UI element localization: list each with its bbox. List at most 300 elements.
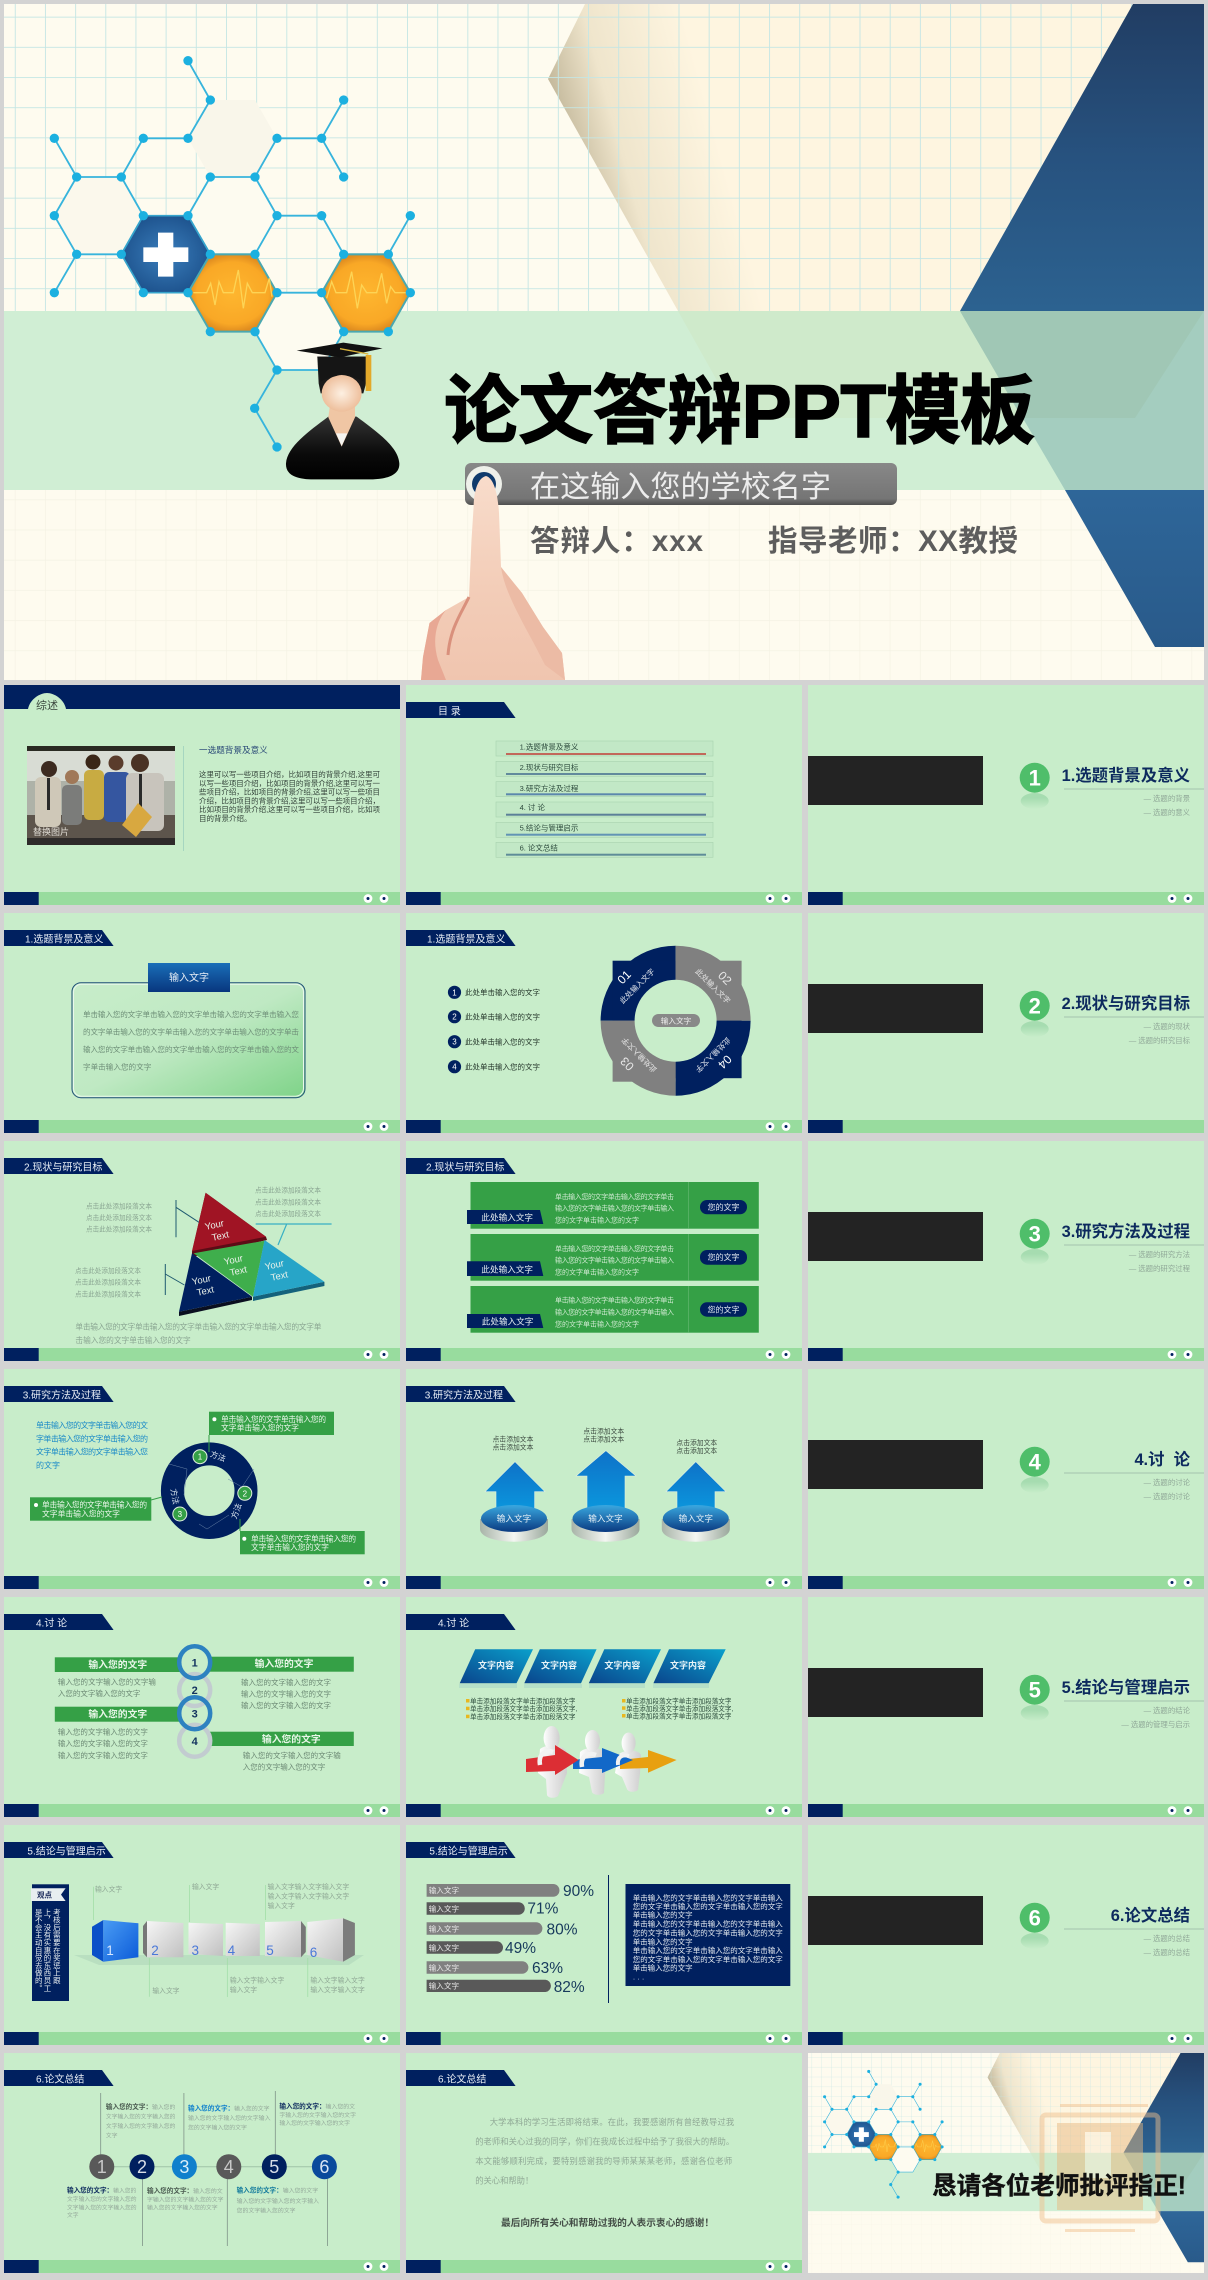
content card (72, 983, 305, 1098)
contents list: 2.现状与研究目标 (520, 762, 579, 772)
footer bar (808, 1804, 1204, 1817)
contents list: 6. 论文总结 (520, 842, 558, 852)
blue intro text (36, 1420, 148, 1470)
panel: section 1 divider (808, 685, 1204, 905)
annotations above blocks: 输入文字输入文字输入文字 (268, 1892, 349, 1900)
ring chart (601, 946, 751, 1096)
callout: top (209, 1412, 334, 1452)
section subtopics: — 选题的讨论 (1144, 1478, 1191, 1487)
text block: upper left (58, 1676, 156, 1698)
ring diagram: 方法 (169, 1488, 181, 1505)
footer bar (808, 2032, 1204, 2045)
header tab: 4.讨 论 (36, 1616, 67, 1630)
3D triangle chart: Text (196, 1284, 215, 1299)
cover background with grid and blue facets (4, 4, 1204, 680)
contents list: 4. 讨 论 (520, 802, 546, 812)
number badge (1020, 1675, 1050, 1721)
row 3 (467, 1286, 759, 1333)
timeline with numbered nodes (89, 2091, 337, 2246)
bar chart: 63% (532, 1960, 563, 1977)
ring diagram: 2 (243, 1489, 248, 1498)
chain of rings (179, 1646, 210, 1757)
section subtopics (1129, 1250, 1191, 1273)
row 1: 此处输入文字 (481, 1212, 533, 1223)
dark image placeholder (808, 1896, 983, 1945)
bar chart: 输入文字 (429, 1885, 459, 1895)
divider (608, 1875, 609, 2003)
number badge: 4 (1029, 1450, 1042, 1474)
ring chart: 此处输入文字 (617, 966, 657, 1006)
photo: team meeting: 替换图片 (33, 826, 69, 837)
text block: lower left: 输入您的文字输入您的文字 (58, 1750, 148, 1760)
annotations above blocks (94, 1882, 349, 1922)
footer bar (406, 2032, 802, 2045)
3D triangle chart: Text (229, 1264, 248, 1279)
text block: lower left (58, 1726, 148, 1760)
blue intro text: 的文字 (36, 1460, 60, 1470)
body text: 些项目介绍，比如项目的背景介绍,这里可以写一些项目 (199, 787, 380, 797)
panel: timeline slide (4, 2053, 400, 2273)
section subtopics: — 选题的研究过程 (1129, 1264, 1191, 1273)
advisor name: 指导老师：XX教授 (768, 525, 1018, 558)
text block 3: 输入您的文字：输入您的文 (279, 2102, 355, 2110)
header tab: 1.选题背景及意义 (427, 932, 505, 946)
number badge (1020, 991, 1050, 1037)
bar chart: 90% (563, 1883, 594, 1900)
text block 1: 输入您的文字：输入您的 (106, 2102, 175, 2111)
body text: 以写一些项目介绍，比如项目的背景介绍,这里可以写一 (199, 778, 380, 788)
content card: 单击输入您的文字单击输入您的文字单击输入您的文字单击输入您 (83, 1009, 299, 1019)
text block 4 (67, 2186, 137, 2219)
thanks paragraph: 的老师和关心过我的同学，你们在我成长过程中给予了我很大的帮助。 (475, 2136, 734, 2146)
text block 2: 输入您的文字输入您的文字输入 (188, 2114, 271, 2122)
section title: 5.结论与管理启示 (1062, 1678, 1190, 1697)
text block 6 (237, 2186, 319, 2214)
green heading bars: 输入您的文字 (88, 1708, 147, 1720)
text block 2: 输入您的文字：输入您的文字 (188, 2104, 270, 2112)
number badge (1020, 1447, 1050, 1493)
footer bar (406, 1120, 802, 1133)
bar chart: 49% (505, 1940, 536, 1957)
block row chart: 1 (106, 1943, 114, 1958)
callout: lower left: 点击此处添加段落文本 (75, 1278, 141, 1287)
four parallelogram labels: 文字内容 (478, 1660, 514, 1670)
arrow button 1 (480, 1462, 548, 1542)
panel: method cycle slide (4, 1369, 400, 1589)
panel: teamwork arrows slide (406, 1597, 802, 1817)
section subtopics: — 选题的意义 (1144, 808, 1191, 817)
callout: upper left: 点击此处添加段落文本 (86, 1202, 152, 1210)
block row chart: 3 (191, 1943, 199, 1958)
numbered list: 4 (452, 1063, 457, 1072)
annotations below blocks: 输入文字 (152, 1986, 180, 1995)
timeline with numbered nodes: 3 (179, 2157, 189, 2177)
thanks paragraph: 的关心和帮助！ (475, 2175, 533, 2185)
footer bar (808, 1348, 1204, 1361)
panel: linked rings slide (4, 1597, 400, 1817)
annotations above blocks: 输入文字 (95, 1884, 122, 1894)
block row chart: 2 (151, 1943, 159, 1958)
footer bar (808, 1576, 1204, 1589)
contents list: 3.研究方法及过程 (520, 783, 579, 793)
text block 6: 输入您的文字：输入您的文字 (237, 2186, 318, 2194)
section title: 2.现状与研究目标 (1062, 994, 1190, 1013)
divider (183, 746, 184, 851)
ring diagram: 方法 (229, 1502, 244, 1520)
numbered list: 1 (452, 988, 457, 997)
navy text panel: 单击输入您的文字单击输入您的文字单击输入 (633, 1892, 783, 1902)
footer bar (406, 892, 802, 905)
dark image placeholder (808, 756, 983, 805)
icon: hexagon network (823, 2070, 944, 2199)
section subtopics: — 选题的现状 (1144, 1022, 1191, 1031)
header tab: 2.现状与研究目标 (24, 1160, 102, 1174)
caption text: 击输入您的文字单击输入您的文字 (75, 1335, 191, 1345)
ring diagram (169, 1449, 254, 1529)
text block: lower right (243, 1750, 341, 1772)
text block: upper right: 输入您的文字输入您的文字 (241, 1688, 331, 1698)
callout: left (30, 1497, 162, 1521)
content card: 字单击输入您的文字 (83, 1062, 152, 1072)
text block 5: 输入您的文字：输入您的文 (147, 2186, 223, 2195)
title: 论文答辩PPT模板 (444, 369, 1035, 453)
annotations below blocks: 输入文字输入文字 (310, 1976, 365, 1984)
callout: upper left: 点击此处添加段落文本 (86, 1213, 152, 1222)
panel: ring diagram slide (406, 913, 802, 1133)
green heading bars: 输入您的文字 (255, 1657, 314, 1670)
panel: section 5 divider (808, 1597, 1204, 1817)
header tab (4, 2070, 114, 2086)
caption text (75, 1322, 322, 1345)
number badge: 3 (1029, 1222, 1041, 1246)
section subtopics: — 选题的总结 (1144, 1934, 1190, 1943)
navy text panel: 您的文字单击输入您的文字单击输入您的文字 (633, 1927, 783, 1937)
text block 1: 文字输入您的文字输入您的 (106, 2122, 176, 2130)
text block: lower right: 输入您的文字输入您的文字输 (243, 1750, 341, 1760)
numbered list: 2 (452, 1013, 457, 1022)
block row chart: 6 (310, 1945, 317, 1960)
annotations below blocks: 输入文字 (230, 1985, 257, 1994)
navy text panel: 单击输入您的文字 (633, 1910, 693, 1920)
navy text panel: 单击输入您的文字 (633, 1936, 693, 1946)
timeline with numbered nodes: 5 (269, 2157, 279, 2177)
footer bar (808, 1120, 1204, 1133)
panel: three row list slide (406, 1141, 802, 1361)
3D triangle chart: Your (204, 1218, 225, 1233)
caption group: 点击添加文本 (583, 1434, 624, 1444)
body text: 介绍，比如项目的背景介绍,这里可以写一些项目介绍， (199, 795, 380, 805)
viewpoint side panel: 考核后需要在奖惩上跟 (52, 1908, 61, 1985)
ring chart: 02 (715, 968, 735, 988)
panel: arrows and buttons slide (406, 1369, 802, 1589)
four parallelogram labels (459, 1649, 726, 1688)
annotations above blocks: 输入文字输入文字输入文字 (268, 1882, 349, 1891)
bar chart: 输入文字 (429, 1942, 459, 1952)
section subtopics (1121, 1706, 1191, 1729)
bar chart: 71% (527, 1900, 559, 1918)
section subtopics: — 选题的研究方法 (1129, 1250, 1190, 1259)
blue intro text: 单击输入您的文字单击输入您的文 (36, 1420, 148, 1430)
header tab (406, 2070, 516, 2086)
text block 2 (188, 2104, 271, 2132)
blue intro text: 文字单击输入您的文字单击输入您 (36, 1447, 148, 1457)
panel: text box slide (4, 913, 400, 1133)
content card: 输入您的文字单击输入您的文字单击输入您的文字单击输入您的文 (83, 1044, 299, 1054)
text block 6: 您的文字输入您的文字 (237, 2206, 296, 2214)
four parallelogram labels: 文字内容 (670, 1660, 706, 1670)
blue title button (148, 963, 230, 992)
school name pill: 在这输入您的学校名字 (530, 471, 831, 504)
bullet text: left: 单击添加段落文字单击添加段落文字 (470, 1696, 576, 1706)
header tab: 5.结论与管理启示 (429, 1844, 508, 1858)
3D triangle chart: Your (264, 1258, 285, 1273)
section subtopics (1144, 1478, 1191, 1501)
viewpoint side panel: 观点 (37, 1890, 52, 1900)
panel: acknowledgement slide (406, 2053, 802, 2273)
number badge (1020, 1903, 1050, 1949)
bullet text: right: 单击添加段落文字单击添加段落文字, (626, 1704, 733, 1713)
numbered list (448, 986, 540, 1073)
footer bar (406, 1804, 802, 1817)
annotations below blocks: 输入文字输入文字 (230, 1976, 284, 1984)
caption group: 点击添加文本 (493, 1434, 534, 1444)
row 3: 您的文字 (708, 1304, 740, 1314)
footer bar (4, 1576, 400, 1589)
row 3: 单击输入您的文字单击输入您的文字单击 (555, 1296, 674, 1305)
chain of rings: 3 (192, 1708, 198, 1720)
arrow button 3 (662, 1462, 730, 1542)
caption text: 单击输入您的文字单击输入您的文字单击输入您的文字单击输入您的文字单 (75, 1322, 322, 1332)
row 2: 此处输入文字 (481, 1263, 533, 1274)
contents list: 5.结论与管理启示 (520, 822, 579, 832)
navy text panel: · · · (633, 1974, 644, 1983)
text block 4: 文字输入您的文字输入您的 (67, 2204, 137, 2212)
navy text panel: 单击输入您的文字 (633, 1963, 693, 1973)
text block 1 (106, 2102, 176, 2140)
header tab (406, 1842, 516, 1858)
bullet text: right (622, 1696, 733, 1720)
body text (199, 769, 380, 823)
photo: team meeting (27, 746, 175, 845)
green heading bars (55, 1657, 354, 1746)
ring chart: 03 (617, 1054, 637, 1074)
chain of rings: 1 (192, 1658, 198, 1670)
section title (1064, 1450, 1204, 1474)
panel: triangle diagram slide (4, 1141, 400, 1361)
callout: upper right: 点击此处添加段落文本 (255, 1209, 321, 1218)
section title: 6.论文总结 (1111, 1906, 1190, 1925)
navy text panel: 单击输入您的文字单击输入您的文字单击输入 (633, 1945, 783, 1955)
arrow button 1: 输入文字 (497, 1512, 531, 1524)
caption group: 点击添加文本 (676, 1438, 717, 1447)
callout: lower left (75, 1264, 184, 1298)
watermark stamp (1042, 2104, 1158, 2232)
chain of rings: 2 (192, 1685, 198, 1697)
text block: upper right (241, 1677, 331, 1710)
bar chart: 输入文字 (429, 1903, 459, 1913)
section title (1064, 1906, 1204, 1930)
row 1 (467, 1182, 759, 1229)
text block: upper right: 输入您的文字输入您的文字 (241, 1677, 331, 1687)
section subtopics: — 选题的总结 (1144, 1948, 1190, 1957)
section subtopics (1144, 1934, 1190, 1957)
dark image placeholder (808, 1440, 983, 1489)
3D triangle chart: Your (223, 1253, 244, 1268)
number badge: 5 (1029, 1678, 1041, 1702)
caption group: 点击添加文本 (493, 1442, 534, 1452)
number badge: 6 (1029, 1906, 1041, 1930)
contents list (496, 741, 713, 857)
text block 2: 您的文字输入您的文字 (188, 2124, 247, 2132)
viewpoint side panel (31, 1884, 69, 2001)
header tab: 5.结论与管理启示 (27, 1844, 106, 1858)
ring chart: 04 (715, 1052, 735, 1072)
ring chart: 此处输入文字 (619, 1035, 659, 1075)
header tab: 4.讨 论 (438, 1616, 469, 1630)
ring chart: 此处输入文字 (693, 1035, 733, 1075)
3D triangle chart (179, 1193, 324, 1316)
footer bar (4, 1348, 400, 1361)
section subtopics (1129, 1022, 1191, 1045)
ring chart: 输入文字 (661, 1015, 692, 1025)
callout: upper right: 点击此处添加段落文本 (255, 1186, 321, 1194)
illustration: figures carrying arrows (526, 1726, 677, 1798)
text block 5: 字输入您的文字输入您的文字 (147, 2196, 224, 2204)
bar chart: 输入文字 (429, 1962, 459, 1972)
header tab: 3.研究方法及过程 (425, 1388, 503, 1402)
viewpoint side panel: 是不会主动自觉去做的。 (34, 1908, 43, 1992)
closing statement: 最后向所有关心和帮助过我的人表示衷心的感谢！ (501, 2216, 714, 2229)
number badge (1020, 1219, 1050, 1265)
annotations above blocks: 输入文字 (192, 1882, 219, 1891)
header tab (4, 1614, 114, 1630)
text block 1: 文字 (106, 2132, 118, 2140)
school name pill (465, 463, 897, 505)
timeline with numbered nodes: 4 (224, 2157, 234, 2177)
header tab (406, 1386, 516, 1402)
block row chart: 5 (266, 1943, 274, 1958)
arrow button 2 (572, 1451, 640, 1542)
block row chart (74, 1918, 364, 1965)
bar chart: 82% (554, 1979, 585, 1996)
row 2 (467, 1234, 759, 1281)
header tab (406, 1614, 516, 1630)
text block 1: 文字输入您的文字输入您的 (106, 2112, 176, 2120)
closing message: 恳请各位老师批评指正! (932, 2171, 1186, 2200)
bar chart: 输入文字 (429, 1981, 459, 1991)
arrow button 3: 输入文字 (679, 1512, 713, 1524)
panel: closing slide (808, 2053, 1204, 2273)
numbered list: 此处单击输入您的文字 (465, 1062, 540, 1072)
row 1: 单击输入您的文字单击输入您的文字单击 (555, 1192, 674, 1201)
footer bar (4, 1804, 400, 1817)
caption group: 点击添加文本 (583, 1426, 624, 1436)
section subtopics: — 选题的研究目标 (1129, 1036, 1191, 1045)
navy text panel: 您的文字单击输入您的文字单击输入您的文字 (633, 1954, 783, 1964)
footer bar (406, 1576, 802, 1589)
row 2: 您的文字单击输入您的文字 (555, 1267, 639, 1276)
blue title button: 输入文字 (169, 971, 209, 984)
footer bar (4, 2032, 400, 2045)
bullet text: right: 单击添加段落文字单击添加段落文字 (626, 1712, 732, 1720)
panel: cover slide (4, 4, 1204, 680)
caption group (493, 1426, 717, 1455)
body text: 比如项目的背景介绍,这里可以写一些项目介绍，比如项 (199, 804, 380, 814)
ring diagram: 方法 (209, 1449, 227, 1464)
section title: 3.研究方法及过程 (1062, 1222, 1190, 1241)
bullet text: left: 单击添加段落文字单击添加段落文字, (470, 1704, 577, 1713)
bullet text: left: 单击添加段落文字单击添加段落文字 (470, 1712, 576, 1721)
header tab (406, 1158, 516, 1174)
thanks paragraph: 大学本科的学习生活即将结束。在此，我要感谢所有曾经教导过我 (490, 2117, 734, 2127)
section subtopics: — 选题的讨论 (1144, 1492, 1191, 1501)
text block 4: 文字 (67, 2211, 79, 2219)
navy text panel: 单击输入您的文字单击输入您的文字单击输入 (633, 1919, 783, 1929)
bar chart: 80% (546, 1922, 578, 1938)
3D triangle chart: Text (211, 1229, 230, 1244)
body text: 目的背景介绍。 (199, 813, 252, 823)
ring chart: 01 (614, 967, 634, 987)
text block: lower left: 输入您的文字输入您的文字 (58, 1738, 148, 1748)
section subtopics: — 选题的管理与启示 (1121, 1720, 1190, 1729)
timeline with numbered nodes: 2 (137, 2157, 147, 2177)
panel: section 4 divider (808, 1369, 1204, 1589)
row 3: 输入您的文字单击输入您的文字单击输入 (555, 1308, 674, 1317)
block row chart: 4 (228, 1943, 236, 1958)
header tab (4, 1842, 114, 1858)
header tab (406, 702, 516, 718)
row 2: 您的文字 (708, 1252, 740, 1262)
closing background (808, 2053, 1204, 2273)
ring diagram: 1 (198, 1453, 203, 1462)
row 1: 您的文字 (708, 1202, 740, 1212)
callout: lower left: 点击此处添加段落文本 (75, 1289, 141, 1298)
section subtopics: — 选题的背景 (1144, 794, 1190, 803)
panel: percentage bars slide (406, 1825, 802, 2045)
numbered list: 3 (452, 1038, 457, 1047)
header tab (4, 930, 114, 946)
callout: upper right (255, 1186, 332, 1245)
text block 5 (147, 2186, 224, 2212)
footer bar (406, 2260, 802, 2273)
callout: right: 文字单击输入您的文字 (251, 1542, 329, 1552)
header tab: 6.论文总结 (36, 2072, 84, 2086)
icon: graduate figure (286, 343, 399, 479)
bar chart (427, 1883, 594, 1996)
presenter name: 答辩人：xxx (530, 525, 704, 558)
callout: top: 单击输入您的文字单击输入您的 (221, 1414, 326, 1424)
dark image placeholder (808, 984, 983, 1033)
navy text panel (626, 1884, 790, 1986)
row 3: 此处输入文字 (482, 1316, 533, 1327)
panel: section 6 divider (808, 1825, 1204, 2045)
header tab: 1.选题背景及意义 (25, 932, 103, 946)
callout: upper left (86, 1200, 199, 1237)
header tab: 3.研究方法及过程 (23, 1388, 101, 1402)
callout: left: 文字单击输入您的文字 (42, 1508, 120, 1518)
timeline with numbered nodes: 6 (319, 2157, 329, 2177)
text block: upper right: 输入您的文字输入您的文字 (241, 1700, 331, 1710)
ring chart: 此处输入文字 (693, 966, 733, 1006)
panel: table of contents slide (406, 685, 802, 905)
green heading bars: 输入您的文字 (88, 1658, 147, 1671)
footer bar (406, 1348, 802, 1361)
numbered list: 此处单击输入您的文字 (465, 1012, 540, 1022)
header tab (4, 1386, 114, 1402)
panel: section 3 divider (808, 1141, 1204, 1361)
footer bar (808, 892, 1204, 905)
header tab: 6.论文总结 (438, 2072, 486, 2086)
